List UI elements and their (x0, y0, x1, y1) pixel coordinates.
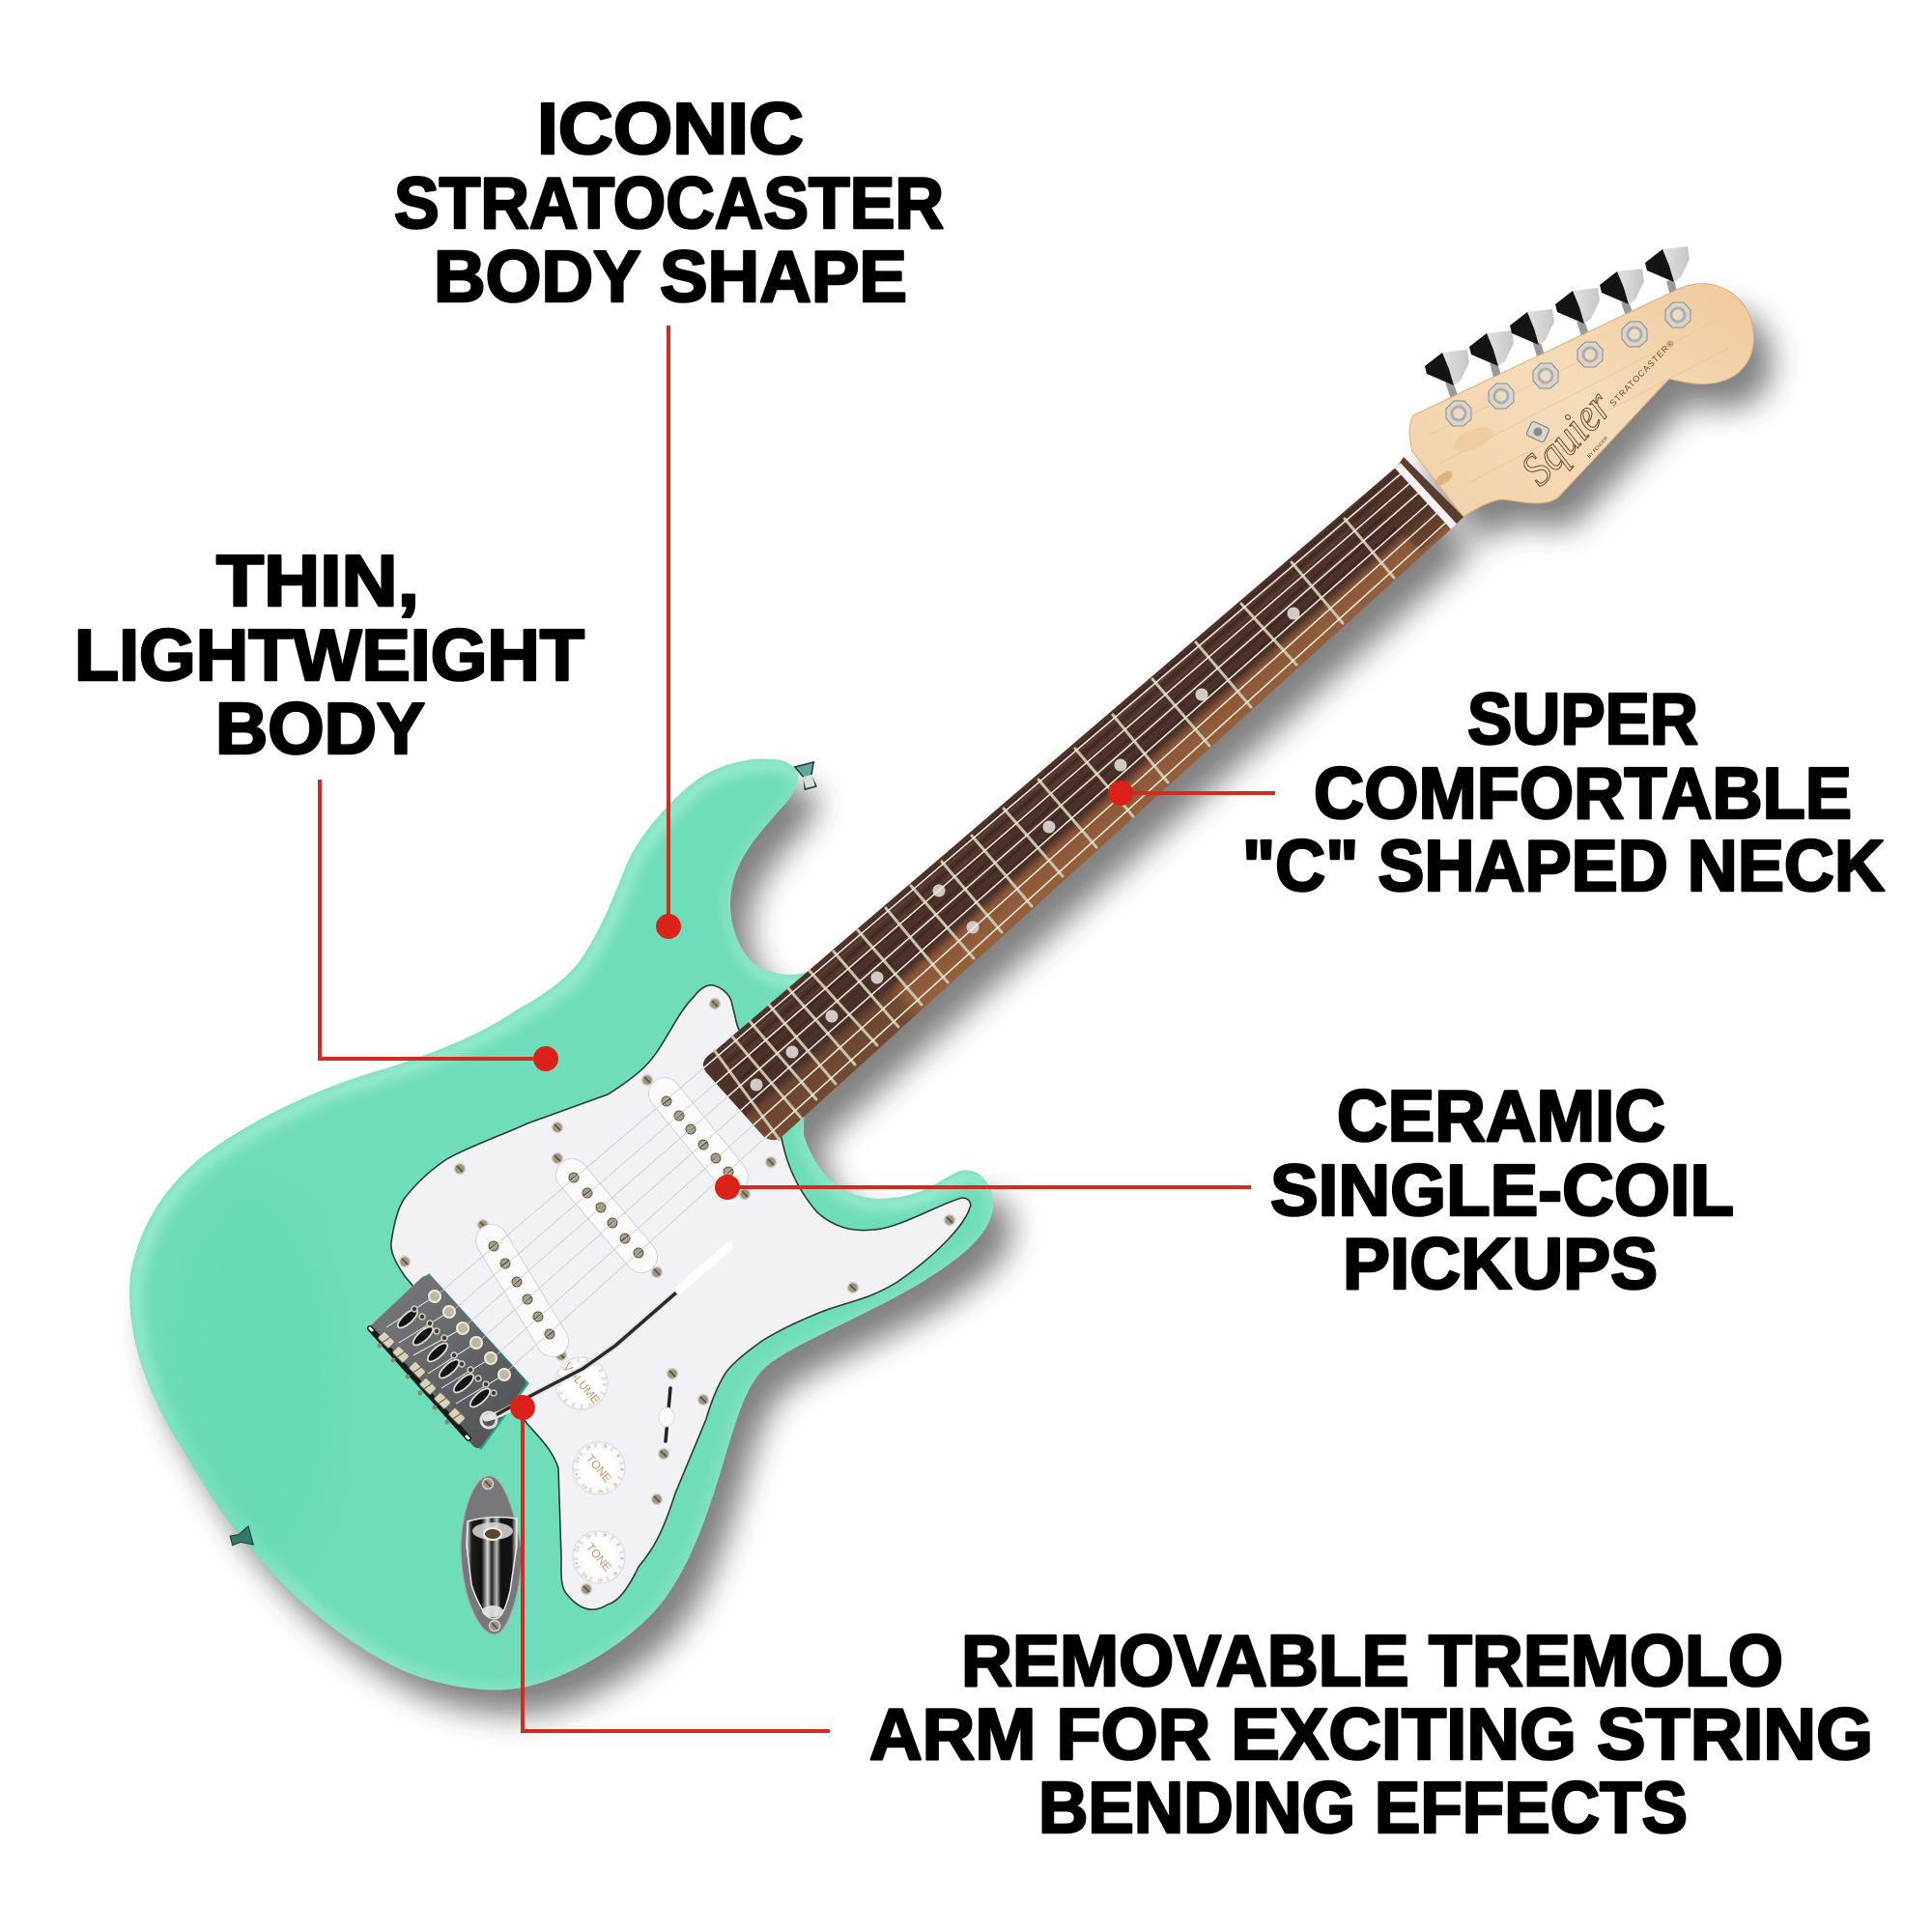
bridge saddles tail (378, 1331, 466, 1425)
knob: tone 2 (573, 1531, 625, 1583)
heading: THIN, (216, 540, 419, 621)
fret markers (750, 607, 1300, 1092)
bridge small saddle rings (412, 1306, 497, 1396)
heading: "C" SHAPED NECK (1242, 825, 1885, 906)
leader line (727, 1185, 1251, 1189)
headstock (1409, 284, 1753, 517)
strings over body (436, 471, 1448, 1374)
knob: tone 1: TONE (583, 1452, 614, 1485)
leader line (320, 780, 546, 1059)
heading (74, 540, 584, 769)
guitar (129, 246, 1773, 1715)
leader line (523, 1407, 830, 1731)
heading: LIGHTWEIGHT (74, 614, 584, 696)
leader line (1121, 791, 1275, 795)
heading: BODY (215, 688, 425, 769)
heading: ICONIC (537, 88, 804, 169)
nut (1398, 466, 1454, 526)
callout: removable tremolo arm (510, 1395, 1873, 1848)
tremolo arm (481, 1247, 728, 1428)
marker dot (656, 914, 681, 939)
guitar body (129, 759, 997, 1693)
tuner washers (1446, 302, 1690, 426)
fretboard (703, 464, 1454, 1140)
by fender: BY FENDER (1586, 436, 1609, 460)
marker dot (510, 1395, 535, 1420)
heading (869, 1620, 1873, 1848)
callout: ceramic pickups (715, 1075, 1734, 1304)
heading (1242, 678, 1885, 906)
bridge pickup (492, 1240, 553, 1341)
heading (394, 88, 944, 317)
jack plate (461, 1476, 522, 1634)
heading (1270, 1075, 1734, 1304)
pickguard screws (400, 999, 954, 1594)
pickup pole pieces (489, 1096, 733, 1339)
headstock logo: Squier (1511, 381, 1622, 495)
pickguard (391, 985, 971, 1609)
bridge slots (395, 1307, 493, 1409)
heading: COMFORTABLE (1314, 753, 1852, 834)
marker dot (1108, 781, 1133, 806)
neck pickup (665, 1094, 732, 1177)
knob: volume: VOLUME (560, 1360, 603, 1406)
heading: SUPER (1467, 678, 1698, 759)
heading: BODY SHAPE (434, 236, 907, 317)
heading: BENDING EFFECTS (1038, 1767, 1688, 1848)
marker dot (715, 1175, 740, 1200)
marker dot (533, 1046, 558, 1071)
heading: REMOVABLE TREMOLO (961, 1620, 1783, 1701)
heading: SINGLE-COIL (1270, 1150, 1734, 1231)
strap button top (795, 762, 820, 790)
string tree (1526, 421, 1549, 442)
pickup selector switch (659, 1388, 674, 1441)
darker wood near nut (1372, 464, 1449, 551)
frets (715, 519, 1394, 1140)
leader line (667, 326, 670, 926)
pickups (492, 1094, 732, 1341)
fretboard extension above nut (1398, 457, 1463, 526)
heading: ARM FOR EXCITING STRING (869, 1693, 1873, 1775)
tremolo bridge (370, 1274, 528, 1449)
heading: CERAMIC (1337, 1075, 1665, 1156)
bridge tail bar (370, 1328, 469, 1438)
darker wood near heel (747, 979, 920, 1140)
callout: iconic stratocaster body shape (394, 88, 944, 939)
strap button bottom (229, 1526, 253, 1550)
knob: tone 1 (573, 1442, 625, 1494)
callout: c shaped neck (1108, 678, 1885, 906)
stratocaster wordmark: STRATOCASTER® (1607, 337, 1676, 408)
heading: PICKUPS (1343, 1223, 1658, 1304)
bridge screw tips (377, 1343, 450, 1424)
strings over fretboard (703, 471, 1449, 1138)
fretboard grain (719, 469, 1429, 1100)
bridge string ends (386, 1296, 504, 1404)
knob: tone 2: TONE (583, 1541, 614, 1574)
callout: thin lightweight body (74, 540, 584, 1071)
bridge front screws (429, 1291, 510, 1380)
tuning machines (1425, 246, 1690, 411)
guitar drop shadow (149, 309, 1773, 1715)
heading: STRATOCASTER (394, 162, 944, 243)
middle pickup (572, 1175, 641, 1257)
